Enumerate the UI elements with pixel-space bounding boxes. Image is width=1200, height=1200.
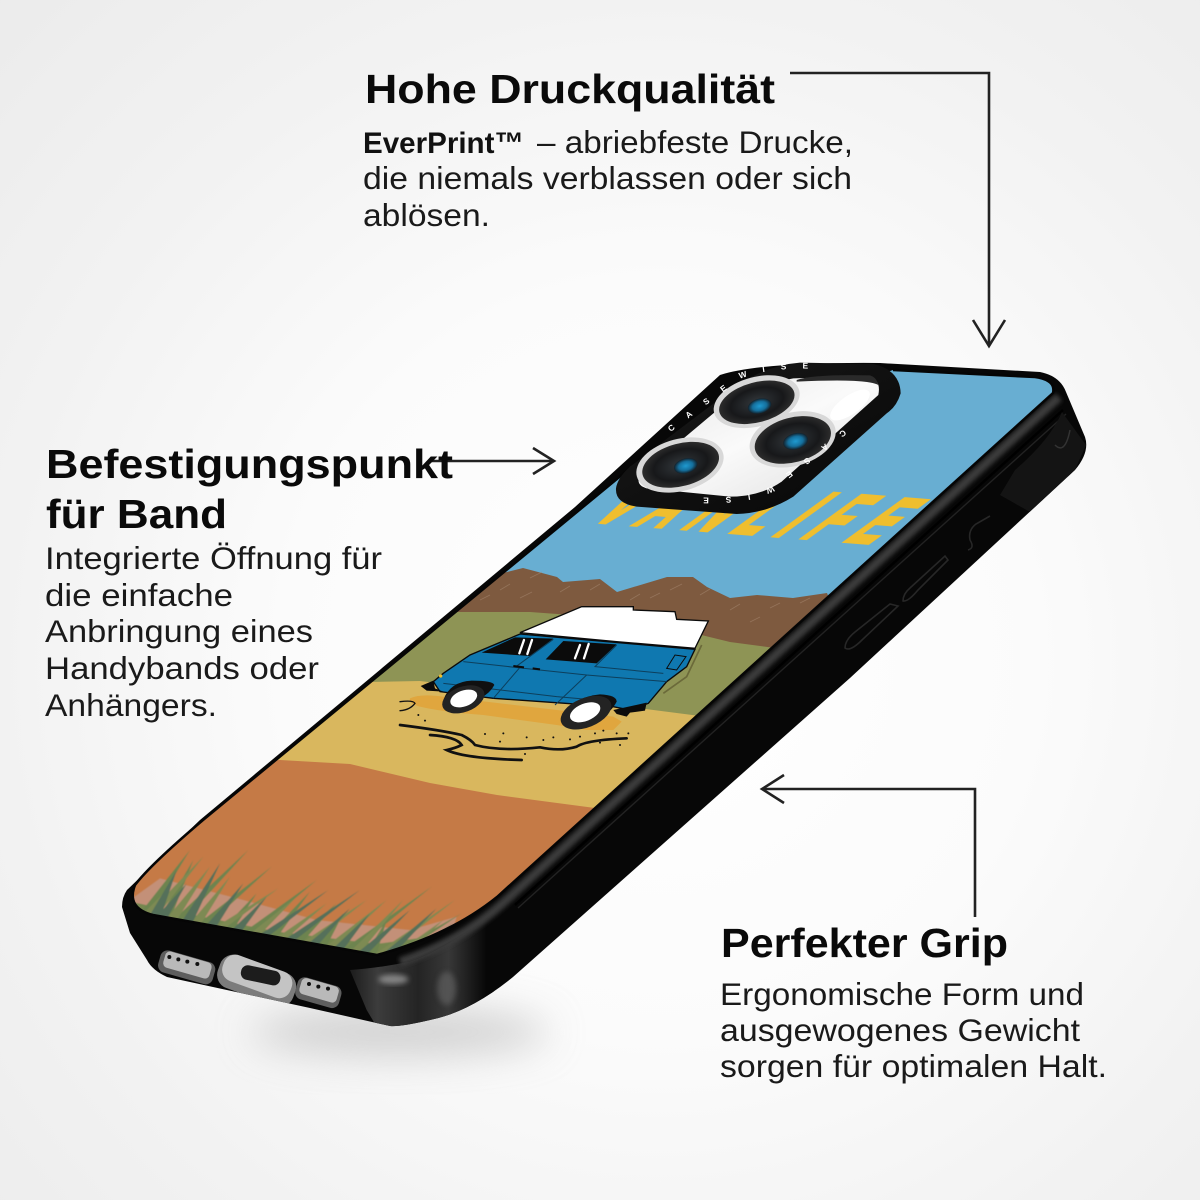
- artwork: [80, 350, 1100, 1000]
- casewise ring text: CASEWISE: [668, 362, 808, 431]
- green field: [372, 612, 770, 716]
- van body: [433, 634, 695, 710]
- lens top: [708, 366, 806, 437]
- lens right: [743, 402, 842, 476]
- heading: [46, 441, 453, 537]
- camera glass: [638, 376, 879, 497]
- usb port: [217, 954, 296, 1004]
- grass: [134, 851, 460, 954]
- body: Anbringung eines: [45, 613, 313, 649]
- rear ladder: [663, 645, 702, 693]
- text block: grip: [720, 920, 1107, 1084]
- heading: Hohe Druckqualität: [365, 66, 775, 112]
- body: – abriebfeste Drucke,: [537, 124, 853, 160]
- sand: [278, 681, 696, 808]
- side buttons: [845, 516, 990, 649]
- arrow: print quality: [790, 73, 1005, 346]
- body: Ergonomische Form und: [720, 976, 1084, 1012]
- body lines: [443, 639, 667, 705]
- body: Anhängers.: [45, 687, 217, 723]
- grille: [667, 655, 686, 670]
- body: [45, 540, 382, 723]
- body: sorgen für optimalen Halt.: [720, 1048, 1107, 1084]
- front bumper: [421, 681, 443, 692]
- casewise ring text: CASEWISE: [704, 430, 846, 504]
- van and tracks: [400, 607, 708, 760]
- door handle: [513, 666, 540, 669]
- headlight: [439, 674, 442, 678]
- rear bumper: [613, 703, 647, 717]
- text block: print quality: [363, 66, 853, 233]
- windows: [482, 637, 553, 656]
- body: Handybands oder: [45, 650, 319, 686]
- body: die einfache: [45, 577, 233, 613]
- body: ausgewogenes Gewicht: [720, 1012, 1080, 1048]
- body: die niemals verblassen oder sich: [363, 160, 852, 196]
- arrow: grip: [762, 775, 975, 917]
- wheel arches: [443, 681, 494, 700]
- phone with printed case: [122, 362, 1086, 1026]
- sky: [506, 370, 1052, 598]
- front wheel: [442, 685, 484, 714]
- text block: strap attachment: [45, 441, 453, 723]
- heading: für Band: [46, 491, 227, 537]
- case body: [122, 363, 1086, 1033]
- rim: [133, 370, 1053, 955]
- van life lettering: VANLIFE: [569, 466, 964, 559]
- body: [720, 976, 1107, 1084]
- mountains: [458, 568, 828, 648]
- body: Integrierte Öffnung für: [45, 540, 382, 576]
- heading: Befestigungspunkt: [46, 441, 453, 487]
- lens left: [630, 428, 730, 502]
- roof: [520, 607, 708, 648]
- arrow: strap attachment: [430, 448, 554, 474]
- bottom edge details: [156, 949, 343, 1011]
- body: ablösen.: [363, 197, 490, 233]
- left speaker: [158, 950, 216, 984]
- orange ground: [134, 760, 594, 931]
- camera module: [616, 362, 901, 514]
- phone shadow: [250, 1008, 550, 1056]
- casewise ring text: [668, 362, 846, 504]
- body: EverPrint™: [363, 127, 524, 160]
- body: [363, 124, 853, 233]
- mud patch: [410, 695, 622, 730]
- camera ring: [616, 363, 901, 514]
- tyre tracks: [400, 701, 627, 760]
- rear wheel: [560, 696, 612, 730]
- heading: Perfekter Grip: [721, 920, 1008, 966]
- right speaker: [295, 977, 342, 1008]
